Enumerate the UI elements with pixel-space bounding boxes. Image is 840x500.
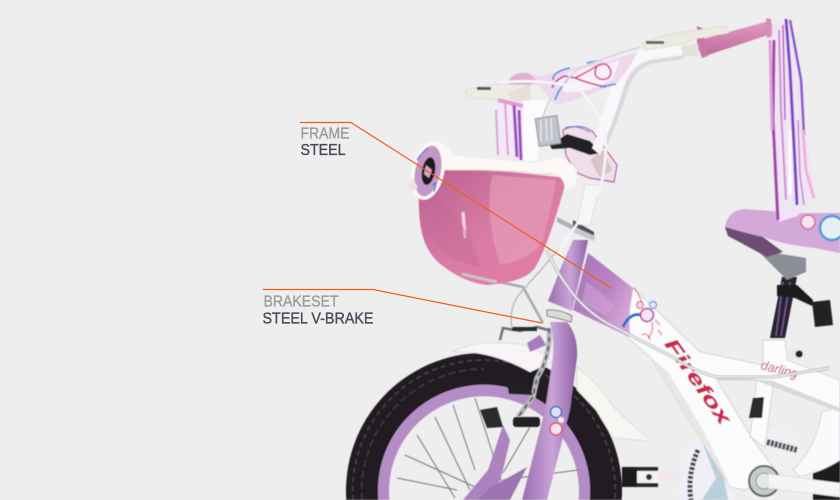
callout line: brakeset xyxy=(263,290,542,323)
brake cables xyxy=(500,47,830,377)
headset xyxy=(557,217,595,241)
label: frame xyxy=(300,126,350,159)
head tube xyxy=(547,240,588,322)
stem and handlebar tube xyxy=(523,49,683,226)
chainring xyxy=(678,437,735,500)
rear fender and chain guard xyxy=(767,407,840,500)
rear axle and crank xyxy=(749,466,840,497)
fork hub and blade xyxy=(463,335,546,500)
front fork leg xyxy=(522,322,577,500)
front tyre xyxy=(346,353,622,500)
basket body xyxy=(419,165,567,285)
main frame white tubes xyxy=(625,288,840,490)
top tube purple xyxy=(573,253,633,337)
basket rim xyxy=(432,142,577,190)
spokes xyxy=(397,398,578,499)
right grip xyxy=(697,18,773,58)
label: brakeset xyxy=(262,294,374,327)
bubble decals on frame xyxy=(623,288,662,340)
basket badge xyxy=(408,141,448,201)
bicycle photo xyxy=(346,18,840,500)
handlebar pad with bubbles xyxy=(508,52,637,105)
label: frame: FRAME xyxy=(300,126,350,142)
pedal xyxy=(622,467,680,487)
darling logo: darling xyxy=(759,357,800,381)
label: frame: STEEL xyxy=(300,142,346,159)
Firefox logo: Firefox xyxy=(660,335,736,431)
bell reflector xyxy=(535,116,561,146)
front fender xyxy=(453,343,648,441)
centre decal and clamp xyxy=(550,126,617,182)
saddle xyxy=(725,209,840,257)
left brake lever xyxy=(465,84,531,102)
right streamer xyxy=(770,18,815,222)
label: brakeset: BRAKESET xyxy=(264,294,339,311)
callout line: frame xyxy=(300,122,611,288)
v-brake arm xyxy=(500,327,549,427)
label: brakeset: STEEL V-BRAKE xyxy=(262,310,374,327)
front rim xyxy=(378,385,590,500)
basket bracket xyxy=(463,240,567,328)
right brake lever xyxy=(643,26,729,56)
left streamer xyxy=(495,98,523,160)
seat post and clamp xyxy=(757,250,833,338)
